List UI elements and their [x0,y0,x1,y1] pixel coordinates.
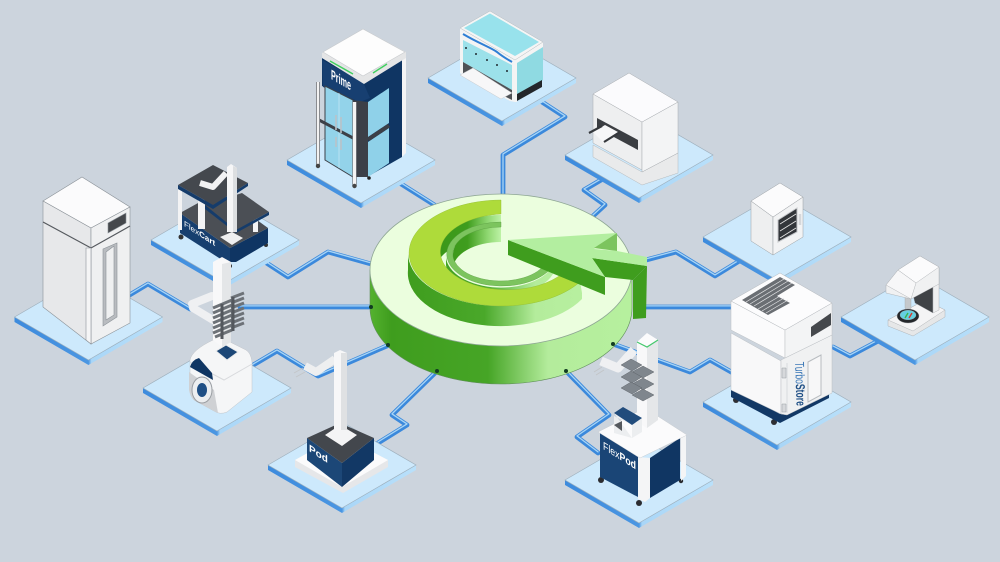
wheels [178,234,268,268]
platform: Pod [268,422,416,513]
arrow shaft end [633,266,647,319]
column [227,164,237,232]
left face [593,94,642,170]
right glass lower [368,128,389,177]
top face [593,73,678,122]
upper right [785,303,832,358]
tray [593,125,618,142]
incubator handle [799,214,801,225]
navy right [650,438,680,498]
side table [614,413,642,438]
navy window [190,358,213,380]
top [598,408,687,458]
base shelf [180,192,268,248]
device: fridge [43,177,130,344]
platform: FlexPod [565,437,713,528]
front rod [352,102,357,186]
platform: incubator [703,194,851,285]
connector sockets [369,305,615,373]
rack [213,293,244,337]
wheel badge [192,377,212,403]
column base [220,232,243,245]
screen [811,313,831,337]
upper left [731,301,785,358]
legs [178,189,258,232]
robot arm [200,173,226,187]
base [593,145,678,185]
middle shelf [205,193,269,230]
teal top [460,11,543,60]
outer ring front wall [408,253,582,326]
right strip [681,434,686,481]
dark frame column [352,100,368,177]
FlexCart label: FlexCart [184,219,215,248]
disk side [370,270,632,384]
device: mobile robot with rack [189,257,252,413]
Pod label: Pod [309,443,328,466]
outer ring back wall [434,215,501,274]
top shelf [178,165,248,205]
green indicator [637,340,658,347]
lower left [731,333,781,414]
column [213,257,231,347]
probe [905,296,911,312]
platform: Prime [287,117,435,208]
rear glass door [325,86,353,177]
navy body [322,58,402,177]
top [731,273,832,330]
arrow shaft wall [592,258,647,280]
device: plate reader [886,256,945,336]
right glass upper [368,88,389,137]
tray [460,68,512,99]
dish [897,309,919,323]
lower right door [781,335,832,415]
arm [601,350,634,368]
inner ring top [447,222,554,286]
column [334,350,347,430]
navy left [307,438,342,487]
platform: white box [565,112,713,203]
slot [597,118,638,150]
TurboStore label: TurboStore [792,362,809,406]
device: white box [589,73,678,185]
fridge door recess [103,243,117,326]
navy right [342,438,374,487]
front face [460,28,515,102]
head [886,256,939,299]
door inset [808,355,821,402]
arrow notch [594,233,617,251]
navy front [180,213,230,265]
connector lines [128,101,880,453]
roof [322,29,406,84]
left rod [316,82,320,165]
hinges [782,368,786,412]
Prime label: Prime [331,67,351,94]
green indicators [330,61,387,74]
gray side [189,372,218,413]
base [517,80,542,101]
base [888,300,945,336]
arm [305,359,335,372]
arm [192,296,213,320]
dark top [307,423,374,463]
door handles [336,115,341,150]
platform: FlexCart [151,197,299,288]
central green disk hub with cycle arrow [369,194,647,384]
incubator window [778,208,797,242]
device: TurboStore [731,273,832,425]
arch column [933,268,939,313]
blue swoosh [463,34,512,62]
device: teal instrument [460,11,543,102]
device: incubator [751,183,803,255]
right strip [402,54,406,157]
device: Prime cabinet [316,29,406,188]
FlexPod label: FlexPod [603,439,636,472]
device: Pod with arm [294,350,388,493]
inner ring outer wall [446,254,554,296]
body [190,338,252,413]
wheels [598,477,683,506]
lower dark bay [463,62,512,100]
disk top [370,194,632,346]
arch back [913,284,933,313]
platform: reader [841,274,989,365]
vent [742,277,795,315]
wheels [733,397,777,425]
device: FlexPod with plates [594,333,687,506]
inner ring hole wall [453,227,501,269]
pallet [295,435,388,493]
white strip [638,457,650,502]
body band [190,362,252,380]
navy base [731,388,829,423]
teal body right [515,42,543,102]
device: FlexCart [178,164,269,268]
arrow top face [508,233,647,277]
column [637,340,658,428]
fridge screen [108,213,126,233]
foot [325,425,357,446]
plates [621,359,654,401]
platform: TurboStore [703,359,851,450]
navy left [600,433,638,497]
platform: mobile robot [143,345,291,436]
arrow sidewall [508,240,605,295]
tray [216,345,238,360]
outer ring top [409,200,581,306]
platform: teal instrument [428,35,576,126]
platform: fridge [14,274,162,365]
right face [642,102,678,172]
